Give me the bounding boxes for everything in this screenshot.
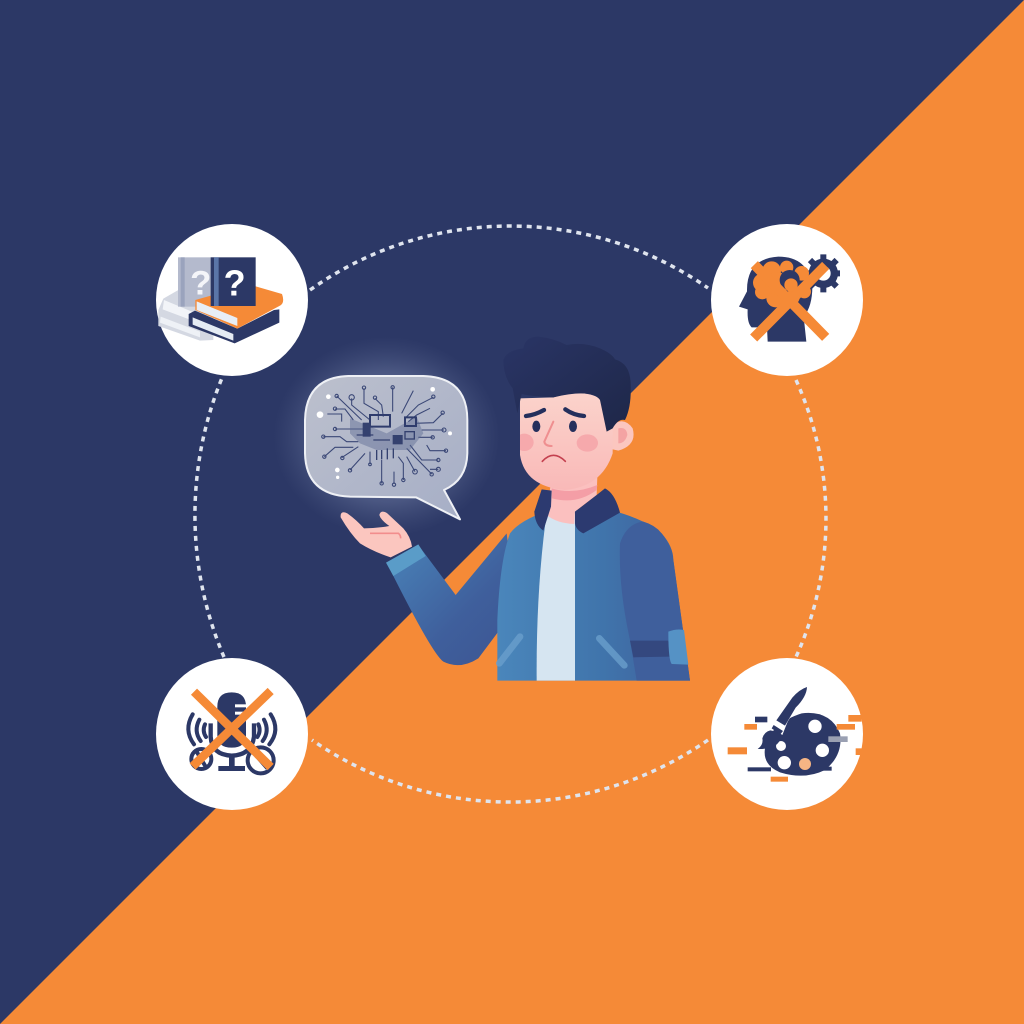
icon: navy lower book: [189, 309, 279, 343]
panel: crossed-out microphone: [156, 658, 308, 810]
ear: [608, 421, 634, 451]
jacket arm: [387, 533, 517, 665]
icon: paint brush: [758, 687, 807, 749]
eyebrows: [526, 409, 584, 416]
t-shirt: [537, 508, 575, 681]
icon: dark question book: ?: [224, 262, 246, 303]
cheeks: [515, 434, 598, 452]
icon: orange cross: [193, 691, 271, 767]
armband: [630, 641, 670, 657]
icon: sound waves: [188, 714, 275, 744]
icon: orange brain: [753, 261, 811, 307]
panel: painter palette: [711, 658, 863, 810]
right pocket: [599, 638, 624, 665]
frown: [542, 455, 565, 461]
right sleeve shading: [620, 522, 690, 681]
circuit chip core: [350, 415, 423, 460]
left pocket: [499, 637, 520, 663]
eyes: [532, 421, 577, 432]
icon: gear: [804, 254, 840, 292]
hand: [341, 512, 412, 557]
icon: motion streaks: [728, 715, 863, 782]
panel: crossed-out head with gear: [711, 224, 863, 376]
speech bubble: [305, 376, 467, 519]
icon: orange upper book: [195, 285, 283, 329]
hair: [503, 337, 631, 432]
nose: [544, 422, 553, 446]
jacket body: [497, 510, 690, 681]
glow behind bubble: [273, 337, 500, 537]
icon: faded book stack: ?: [190, 265, 211, 303]
icon: gear inside brain: [780, 270, 800, 292]
face: [520, 393, 613, 490]
icon: orange cross: [754, 265, 826, 338]
circuit illustration: [322, 386, 448, 486]
panel: person with speech bubble: [273, 337, 690, 681]
dashed connecting ring: [195, 226, 826, 802]
panel: books with question marks: [156, 224, 308, 376]
neck: [547, 477, 597, 524]
sleeve tab: [668, 629, 688, 665]
neck shadow: [552, 485, 597, 500]
collar left: [534, 489, 552, 531]
bubble sparkles: [317, 387, 452, 479]
collar right: [575, 488, 620, 533]
icon: microphone: [211, 692, 254, 771]
jacket cuff: [386, 544, 426, 576]
icon: side wheels: [191, 747, 274, 773]
icon: head silhouette: [739, 257, 812, 342]
icon: palette: [765, 713, 841, 776]
